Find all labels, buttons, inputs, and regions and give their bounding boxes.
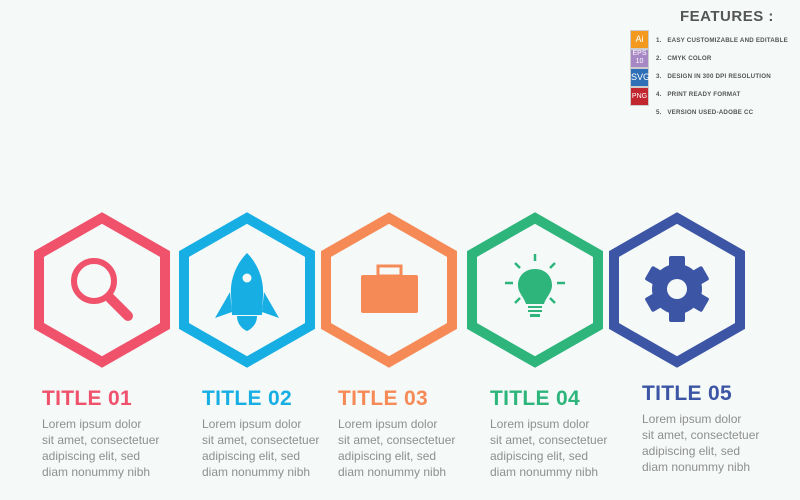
feature 4: 4. PRINT READY FORMAT [656,91,740,98]
text 02: diam nonummy nibh [202,465,310,479]
text 04: sit amet, consectetuer [490,433,607,447]
text 01: diam nonummy nibh [42,465,150,479]
icon: rocket [215,253,279,331]
feature 5: 5. VERSION USED-ADOBE CC [656,109,753,116]
hexagon 5 gear [614,218,740,362]
feature 3: 3. DESIGN IN 300 DPI RESOLUTION [656,73,771,80]
feature 2: 2. CMYK COLOR [656,55,712,62]
text 01: adipiscing elit, sed [42,449,140,463]
text 04: adipiscing elit, sed [490,449,588,463]
text 04 [490,417,608,479]
text 05 [642,412,760,474]
features heading: FEATURES : [680,8,774,25]
text 05: sit amet, consectetuer [642,428,759,442]
text 03 [338,417,456,479]
text 04: diam nonummy nibh [490,465,598,479]
text 04: Lorem ipsum dolor [490,417,589,431]
text 02: adipiscing elit, sed [202,449,300,463]
hexagon 1 search [39,218,165,362]
icon: gear [644,256,710,322]
text 02 [202,417,320,479]
icon: EPS [630,49,649,68]
text 01: sit amet, consectetuer [42,433,159,447]
hexagon 4 bulb [472,218,598,362]
text 01 [42,417,160,479]
text 03: Lorem ipsum dolor [338,417,437,431]
text 05: diam nonummy nibh [642,460,750,474]
feature 1: 1. EASY CUSTOMIZABLE AND EDITABLE [656,37,788,44]
title 01: TITLE 01 [42,387,132,410]
text 03: sit amet, consectetuer [338,433,455,447]
title 03: TITLE 03 [338,387,428,410]
hexagon 3 briefcase [326,218,452,362]
icon: PNG: PNG [632,93,647,100]
text 02: sit amet, consectetuer [202,433,319,447]
features panel [630,8,788,116]
icon: briefcase [361,266,418,313]
hexagon 2 rocket [184,218,310,362]
text 01: Lorem ipsum dolor [42,417,141,431]
icon: PNG [630,87,649,106]
title 02: TITLE 02 [202,387,292,410]
text 03: adipiscing elit, sed [338,449,436,463]
title 04: TITLE 04 [490,387,580,410]
icon: Ai: Ai [635,34,644,44]
text 02: Lorem ipsum dolor [202,417,301,431]
text 05: adipiscing elit, sed [642,444,740,458]
title 05: TITLE 05 [642,382,732,405]
text 05: Lorem ipsum dolor [642,412,741,426]
icon: SVG: SVG [631,72,650,82]
icon: SVG [630,68,649,87]
text 03: diam nonummy nibh [338,465,446,479]
icon: EPS: EPS [632,50,646,57]
icon: EPS: 10 [636,58,643,65]
icon: magnifier [74,261,128,316]
icon: Ai [630,30,649,49]
icon: light bulb [505,254,565,317]
